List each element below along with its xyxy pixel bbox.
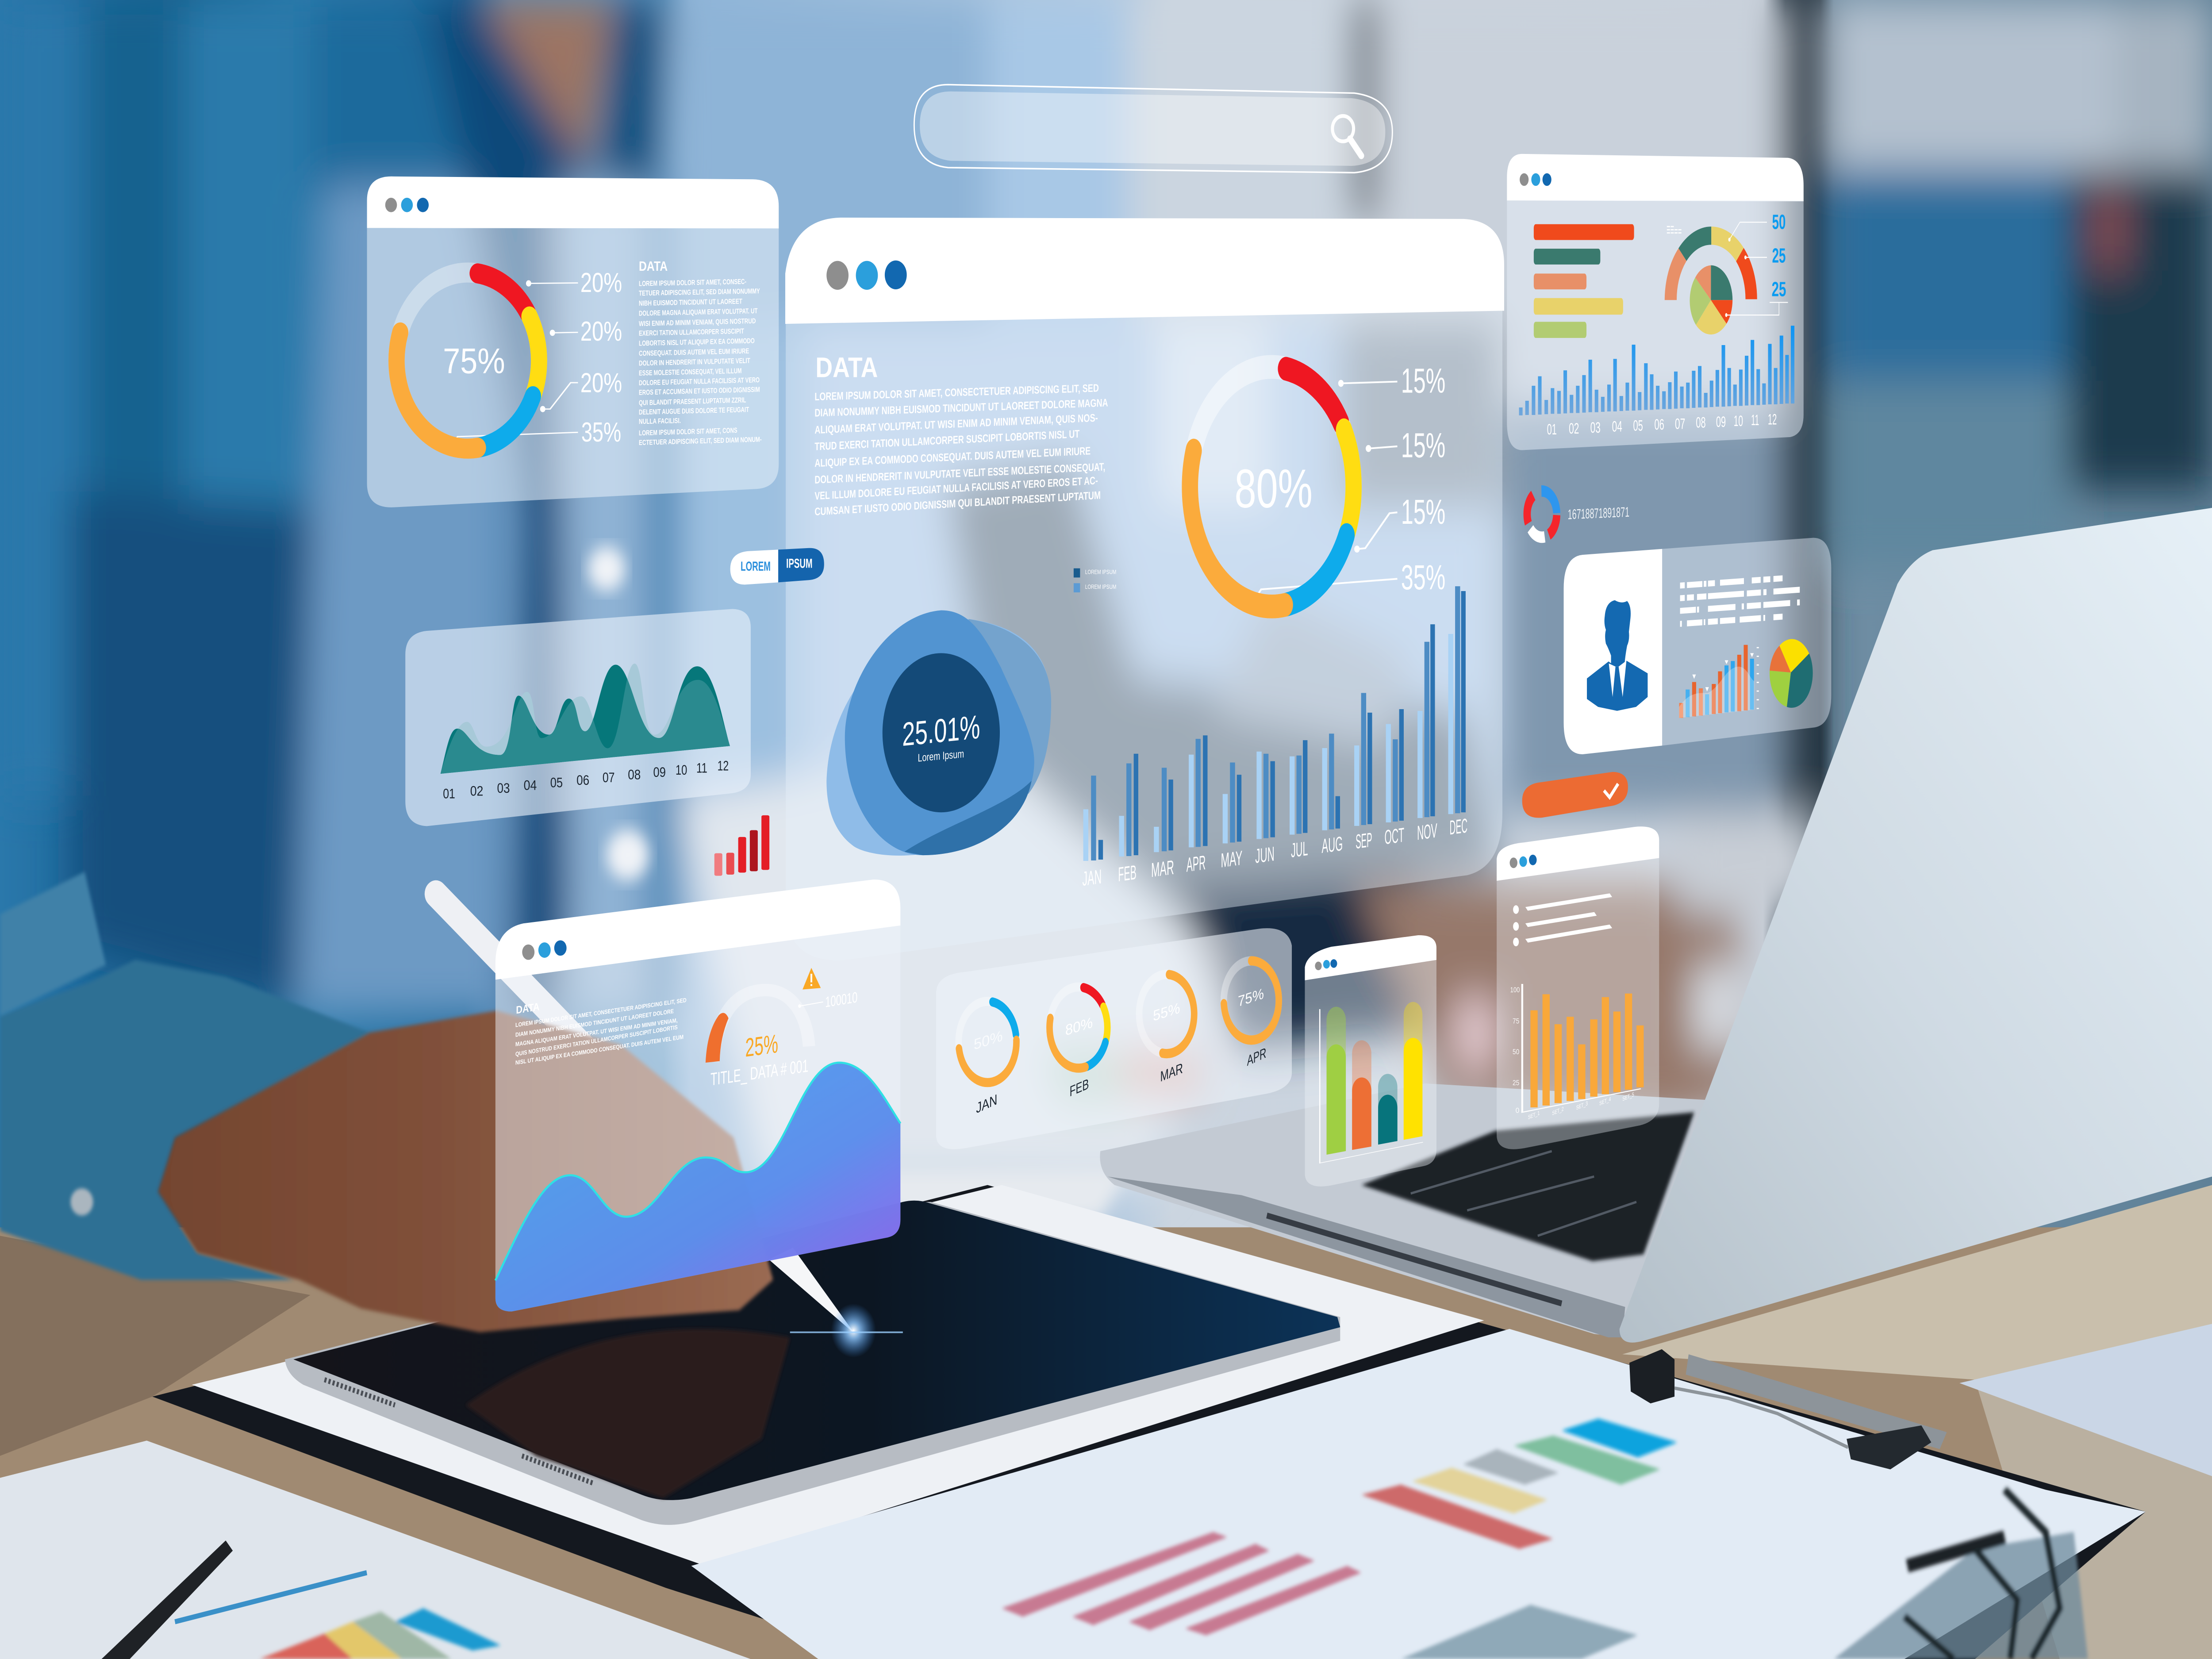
bar chart: 12 periods [1519, 326, 1794, 415]
callouts: 50 [1772, 211, 1786, 233]
month labels: APR [1187, 851, 1206, 876]
area chart [495, 1063, 900, 1312]
small segmented donut with id number [1527, 491, 1629, 537]
leader lines and percent labels: 15% [1401, 426, 1445, 465]
ring: MAR 55% [1139, 975, 1194, 1054]
month labels: AUG [1322, 832, 1343, 857]
glasses on clipboard [1834, 1490, 2088, 1659]
text block: LOREM IPSUM DOLOR SIT AMET, CONSECTETUER ADIPISCING ELIT, SED [814, 382, 1099, 403]
month labels: JAN [1083, 865, 1102, 890]
panel: tablet area chart [495, 879, 900, 1312]
axis labels: 09 [653, 764, 666, 780]
axis labels [1547, 411, 1777, 438]
leader lines and percent labels [1235, 361, 1445, 603]
icon: person silhouette [1587, 600, 1647, 711]
text block: LOREM IPSUM DOLOR SIT AMET, CONSEC- [639, 277, 746, 288]
text block: WISI ENIM AD MINIM VENIAM, QUIS NOSTRUD [639, 317, 756, 328]
pen on paper [102, 1540, 233, 1659]
text block [814, 382, 1108, 518]
legend [1074, 568, 1116, 592]
ring and month labels: JAN [976, 1091, 997, 1117]
front area series [441, 665, 730, 774]
right paper [1959, 1324, 2212, 1476]
panel content group [785, 218, 1504, 890]
mini bar chart [1679, 645, 1759, 718]
axis labels: 04 [1612, 418, 1622, 435]
ring: JAN 50% [959, 1001, 1017, 1083]
axis labels: 12 [1768, 411, 1777, 428]
window dots [826, 261, 907, 290]
series overlap [441, 679, 730, 774]
axis labels: 08 [628, 767, 641, 782]
ring and month labels [974, 985, 1266, 1117]
gauge: 25% [745, 1029, 778, 1063]
pill toggle: lorem ipsum: IPSUM [786, 557, 813, 571]
axis labels: 02 [1569, 420, 1579, 437]
x axis labels: SET_1 [1528, 1110, 1540, 1121]
axis labels: 05 [1633, 417, 1643, 434]
axes [1320, 1009, 1423, 1163]
axis labels: 02 [470, 783, 483, 799]
shirt buttons [588, 547, 625, 591]
panel: orange bar chart [1497, 826, 1659, 1149]
text block [639, 277, 762, 447]
redacted text lines [1680, 574, 1800, 627]
axis labels [443, 758, 729, 801]
window dots [522, 940, 567, 960]
leader lines and percent labels: 15% [1401, 493, 1445, 531]
ring and month labels: MAR [1160, 1060, 1183, 1085]
panel: four progress rings [936, 928, 1292, 1149]
pie chart [1770, 639, 1813, 708]
callouts [1667, 211, 1788, 317]
text block: EXERCI TATION ULLAMCORPER SUSCIPIT [639, 327, 744, 337]
text block: DIAM NONUMMY NIBH EUISMOD TINCIDUNT UT LAOREET DOLORE MAGNA [814, 397, 1108, 419]
text block: QUI BLANDIT PRAESENT LUPTATUM ZZRIL [639, 396, 746, 407]
window header [367, 177, 779, 228]
axis labels: 07 [603, 769, 615, 785]
text block: TRUD EXERCI TATION ULLAMCORPER SUSCIPIT LOBORTIS NISL UT [814, 428, 1080, 453]
axis labels: 01 [443, 786, 455, 801]
gauge: 100010 [825, 989, 857, 1011]
panel body [786, 310, 1502, 960]
text block: CONSEQUAT. DUIS AUTEM VEL EUM IRIURE [639, 347, 749, 357]
gauge arc [1665, 227, 1757, 300]
text block [515, 997, 687, 1066]
axis labels: 10 [1734, 412, 1743, 429]
window header [495, 879, 900, 980]
pill toggle: lorem ipsum: LOREM [741, 559, 771, 574]
icon: check mark [1604, 784, 1618, 797]
month labels: FEB [1118, 861, 1137, 886]
text block: NULLA FACILISI. [639, 417, 681, 426]
bars [1530, 994, 1644, 1107]
apple pencil upper [436, 894, 599, 1063]
document with colored stripes [691, 1329, 2146, 1659]
leader lines and percent labels [449, 267, 622, 448]
window header [1507, 154, 1804, 201]
text block: ALIQUIP EX EA COMMODO CONSEQUAT. DUIS AUTEM VEL EUM IRIURE [814, 445, 1091, 469]
panel content group [367, 177, 779, 507]
month labels: MAY [1221, 846, 1242, 872]
panel: big data panel [785, 218, 1504, 960]
icon: magnifier [1333, 116, 1361, 156]
axis labels: 08 [1696, 414, 1706, 431]
y axis labels: 0 [1516, 1107, 1519, 1114]
desk [0, 1227, 2212, 1659]
x axis labels: SET_2 [1552, 1105, 1564, 1117]
leader lines and percent labels: 20% [580, 316, 622, 347]
callouts: 25 [1772, 277, 1786, 300]
ring and month labels: 80% [1065, 1014, 1093, 1039]
heading: DATA: DATA [815, 351, 878, 383]
ring: FEB 80% [1049, 987, 1107, 1068]
leader lines and percent labels: 80% [1235, 458, 1313, 519]
text block: LOREM IPSUM DOLOR SIT AMET, CONSECTETUER ADIPISCING ELIT, SED [515, 997, 687, 1029]
x axis labels: SET_4 [1599, 1095, 1611, 1107]
axis labels: 06 [1655, 416, 1664, 433]
area chart top line [495, 1063, 900, 1280]
text block: CUMSAN ET IUSTO ODIO DIGNISSIM QUI BLANDIT PRAESENT LUPTATUM [814, 489, 1101, 518]
panel content group: DEC [1450, 814, 1467, 839]
panel: top-right mixed charts [1507, 154, 1804, 450]
blob stat: 25.01%: 25.01% [902, 708, 980, 753]
text block: QUIS NOSTRUD EXERCI TATION ULLAMCORPER SUSCIPIT LOBORTIS [515, 1024, 678, 1057]
icon: warning triangle [803, 968, 821, 990]
heading: DATA: DATA [516, 1001, 540, 1017]
text block: LOBORTIS NISL UT ALIQUIP EX EA COMMODO [639, 337, 755, 347]
panel: profile card [1564, 538, 1831, 754]
donut chart: 75% [396, 273, 539, 449]
leader lines and percent labels: 15% [1401, 361, 1445, 400]
apple pencil tip [769, 1248, 855, 1334]
axis labels: 11 [1751, 411, 1759, 429]
month labels: OCT [1385, 824, 1404, 849]
bars: green, orange, teal, yellow [1327, 1002, 1422, 1155]
base tones [0, 0, 2212, 1286]
clipboard [152, 1185, 2146, 1659]
panel: teal area chart [405, 609, 751, 826]
panel: arched bar chart [1305, 935, 1436, 1187]
axis labels: 06 [576, 772, 589, 788]
leader lines and percent labels: 35% [1401, 558, 1445, 597]
hand holding pen [158, 1010, 773, 1332]
panel body [495, 926, 900, 1312]
y axis labels [1510, 986, 1520, 1114]
text block: DELENIT AUGUE DUIS DOLORE TE FEUGAIT [639, 406, 749, 416]
window dots [1510, 855, 1537, 868]
month labels: NOV [1417, 819, 1437, 844]
blob stat: 25.01% [826, 611, 1051, 856]
window header [1305, 935, 1436, 980]
panel body [936, 928, 1292, 1149]
heading: DATA: DATA [639, 259, 668, 274]
x axis labels [1528, 1091, 1634, 1121]
window dots [1315, 959, 1337, 970]
pencil tip flare [790, 1303, 903, 1358]
callouts: 25 [1772, 244, 1786, 267]
panel: four progress rings: APR [1247, 1045, 1266, 1069]
blob stat: 25.01%: Lorem Ipsum [918, 748, 964, 764]
leader lines and percent labels: 20% [580, 367, 622, 398]
axis labels: 03 [497, 780, 510, 796]
panel: four progress rings: 75% [1238, 985, 1264, 1010]
card left white [1564, 549, 1662, 754]
month labels [1083, 814, 1467, 890]
axis labels: 09 [1716, 413, 1726, 430]
month labels: MAR [1151, 856, 1174, 881]
search bar [914, 84, 1392, 173]
behind big panel [804, 322, 1498, 948]
axis labels: 07 [1675, 415, 1685, 432]
legend: LOREM IPSUM [1085, 584, 1116, 591]
ring and month labels: 55% [1153, 999, 1180, 1024]
axis labels: 01 [1547, 421, 1557, 438]
panel body [1497, 858, 1659, 1149]
pill toggle: lorem ipsum [730, 548, 824, 584]
text block: ECTETUER ADIPISCING ELIT, SED DIAM NONUM- [639, 435, 762, 447]
axis labels: 04 [524, 777, 537, 793]
pie chart [1690, 265, 1732, 334]
blurred upper scene [0, 0, 2212, 1185]
window header [1497, 826, 1659, 881]
ring and month labels: FEB [1070, 1075, 1089, 1100]
month labels: SEP [1356, 828, 1372, 853]
x axis labels: SET_3 [1576, 1100, 1588, 1111]
axis labels: 10 [676, 762, 687, 778]
text block: DOLORE MAGNA ALIQUAM ERAT VOLUTPAT. UT [639, 307, 757, 317]
month labels: JUN [1255, 842, 1275, 868]
bullet list [1513, 895, 1611, 946]
panel: orange bar chart: 100 [1510, 986, 1520, 994]
text block: DOLOR IN HENDRERIT IN VULPUTATE VELIT [639, 357, 750, 367]
hand reflection on screen [465, 1329, 790, 1498]
icon: red signal bars [714, 815, 769, 876]
month labels: JUL [1291, 837, 1308, 862]
small segmented donut with id number: 16718871891871 [1568, 505, 1629, 522]
leader lines and percent labels: 35% [581, 416, 621, 447]
panel: orange bar chart: 50 [1513, 1048, 1519, 1056]
text block: DIAM NONUMMY NIBH EUISMOD TINCIDUNT UT LAOREET DOLORE [515, 1008, 674, 1038]
leader lines and percent labels: 20% [580, 267, 622, 298]
panel: top-left donut [367, 177, 779, 507]
axis labels: 12 [718, 758, 729, 773]
gauge: TITLE_ DATA # 001 [710, 1056, 808, 1090]
text block: EROS ET ACCUMSAN ET IUSTO ODIO DIGNISSIM [639, 385, 760, 396]
tablet [285, 1202, 1340, 1525]
window dots [1520, 173, 1551, 186]
panel body [367, 228, 779, 507]
clip [1629, 1349, 1947, 1469]
axis labels: 05 [550, 775, 563, 790]
donut chart: 80% [1190, 367, 1354, 607]
laptop base [1100, 1083, 1714, 1337]
text block: MAGNA ALIQUAM ERAT VOLUTPAT. UT WISI ENIM AD MINIM VENIAM, [515, 1017, 678, 1048]
panel: orange bar chart: 75 [1513, 1018, 1519, 1025]
panel: orange bar chart: 25 [1513, 1079, 1519, 1087]
axis labels: 11 [696, 760, 707, 776]
legend: LOREM IPSUM [1085, 569, 1116, 576]
lower-left paper [0, 1440, 750, 1659]
text block: NISL UT ALIQUIP EX EA COMMODO CONSEQUAT. DUIS AUTEM VEL EUM [515, 1033, 684, 1066]
grouped bar chart [1083, 586, 1466, 861]
text block: LOREM IPSUM DOLOR SIT AMET, CONS [639, 426, 737, 437]
text block: DOLORE EU FEUGIAT NULLA FACILISIS AT VERO [639, 376, 760, 387]
ring and month labels: 50% [974, 1027, 1002, 1053]
panel body [1507, 200, 1804, 450]
panel body [405, 609, 751, 826]
gauge [706, 989, 857, 1090]
axes [1522, 984, 1641, 1112]
text block: NIBH EUISMOD TINCIDUNT UT LAOREET [639, 297, 742, 307]
back area series [441, 664, 730, 774]
text block: ESSE MOLESTIE CONSEQUAT, VEL ILLUM [639, 367, 742, 377]
horizontal bars [1534, 224, 1634, 338]
blurred left desk papers near laptop [846, 1168, 1129, 1219]
axis labels: 03 [1590, 419, 1601, 436]
laptop lid [1620, 508, 2212, 1343]
sleeve cuff [0, 960, 369, 1280]
donut center value: 75% [443, 341, 505, 381]
panel body [1305, 960, 1436, 1187]
text block: DOLOR IN HENDRERIT IN VULPUTATE VELIT ESSE MOLESTIE CONSEQUAT, [814, 461, 1105, 486]
text block: TETUER ADIPISCING ELIT, SED DIAM NONUMMY [639, 287, 760, 297]
window header [785, 218, 1504, 324]
window dots [385, 198, 429, 212]
panel: orange bar chart: SET_5 [1622, 1091, 1634, 1102]
orange check pill [1522, 772, 1628, 818]
ring: APR 75% [1224, 961, 1279, 1040]
text block: VEL ILLUM DOLORE EU FEUGIAT NULLA FACILISIS AT VERO EROS ET AC- [814, 475, 1098, 502]
card right body [1662, 538, 1831, 745]
text block: ALIQUAM ERAT VOLUTPAT. UT WISI ENIM AD MINIM VENIAM, QUIS NOS- [814, 412, 1098, 436]
